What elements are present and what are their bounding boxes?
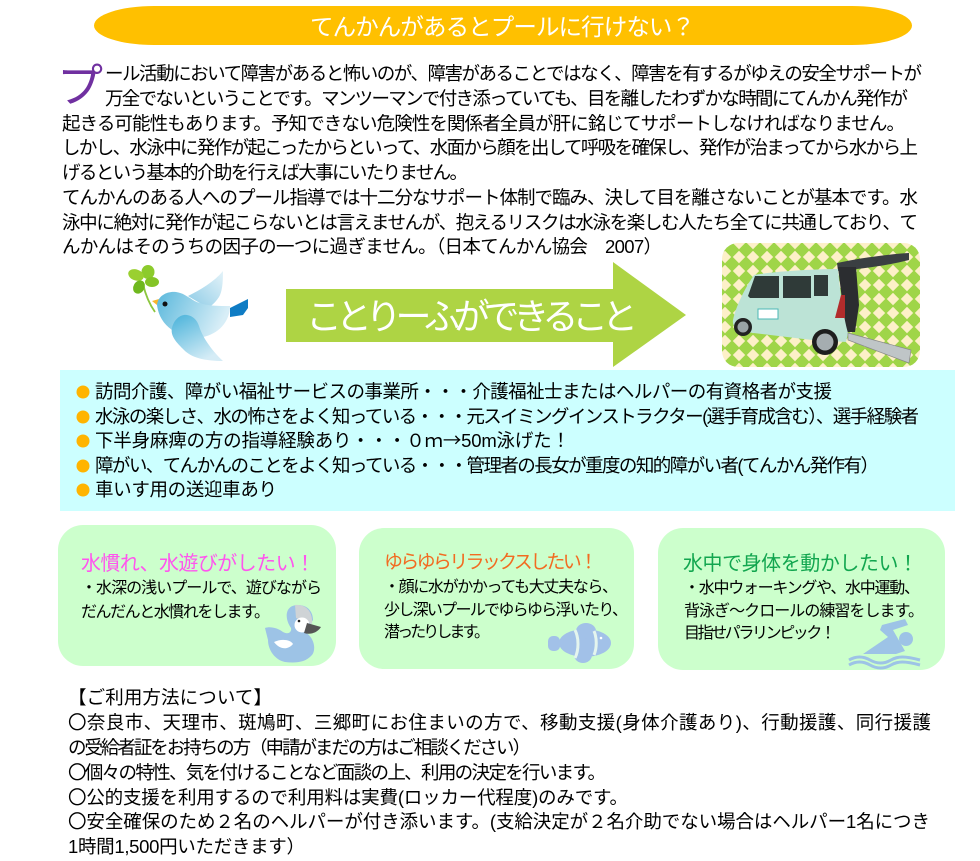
panel: exercise card: 目指せパラリンピック！ (684, 624, 836, 642)
panel: water play card: 水慣れ、水遊びがしたい！ (81, 552, 315, 575)
intro paragraph (57, 60, 922, 257)
icon: bluebird with clover (127, 265, 248, 361)
icon: swimmer (849, 619, 920, 668)
usage information: の受給者証をお持ちの方（申請がまだの方はご相談ください） (68, 737, 531, 758)
intro paragraph: 起きる可能性もあります。予知できない危険性を関係者全員が肝に銘じてサポートしなければなりません。 (62, 113, 905, 134)
icon: duck (265, 605, 321, 662)
list item: home-care staff: 訪問介護、障がい福祉サービスの事業所・・・介護福祉士またはヘルパーの有資格者が支援 (95, 381, 832, 402)
list item: coaching experience: 下半身麻痺の方の指導経験あり・・・０ｍ→50m泳げた！ (95, 427, 570, 453)
photo: accessible van on checker background (722, 243, 920, 367)
title banner: てんかんがあるとプールに行けない？ (310, 14, 695, 40)
panel: exercise card: 背泳ぎ～クロールの練習をします。 (684, 602, 924, 620)
intro paragraph: げるという基本的介助を行えば大事にいたりません。 (62, 162, 468, 183)
intro paragraph: ール活動において障害があると怖いのが、障害があることではなく、障害を有するがゆえの安全サポートが (105, 63, 922, 84)
usage information (68, 687, 931, 857)
list item: transport: 車いす用の送迎車あり (95, 479, 277, 500)
usage information: 〇公的支援を利用するので利用料は実費(ロッカー代程度)のみです。 (68, 787, 628, 808)
panel: water play card: だんだんと水慣れをします。 (81, 603, 270, 621)
panel: exercise card: ・水中ウォーキングや、水中運動、 (684, 579, 920, 597)
icon: clownfish (548, 623, 611, 663)
intro paragraph: んかんはそのうちの因子の一つに過ぎません。（日本てんかん協会 2007） (62, 236, 662, 257)
panel: relax card (359, 528, 634, 669)
usage information: 〇安全確保のため２名のヘルパーが付き添います。(支給決定が２名介助でない場合はヘルパー1名につき (68, 811, 930, 832)
usage information: 〇個々の特性、気を付けることなど面談の上、利用の決定を行います。 (68, 762, 606, 783)
intro paragraph: てんかんのある人へのプール指導では十二分なサポート体制で臨み、決して目を離さないことが基本です。水 (62, 187, 918, 208)
intro paragraph: 泳中に絶対に発作が起こらないとは言えませんが、抱えるリスクは水泳を楽しむ人たち全てに共通しており、て (62, 212, 918, 233)
panel: relax card: ・顔に水がかかっても大丈夫なら、 (384, 578, 618, 596)
panel: water play card (58, 525, 336, 666)
panel: what we can do (60, 370, 955, 511)
list item: swimming experience: 水泳の楽しさ、水の怖さをよく知っている・・・元スイミングインストラクター(選手育成含む）、選手経験者 (95, 406, 919, 427)
panel: relax card: 潜ったりします。 (384, 623, 490, 641)
intro paragraph: しかし、水泳中に発作が起こったからといって、水面から顔を出して呼吸を確保し、発作が治まってから水から上 (62, 137, 918, 158)
panel: exercise card: 水中で身体を動かしたい！ (683, 552, 918, 575)
usage information: 〇奈良市、天理市、斑鳩町、三郷町にお住まいの方で、移動支援(身体介護あり)、行動援護、同行援護 (68, 712, 931, 733)
arrow: ことりーふができること (286, 262, 686, 367)
arrow: ことりーふができること: ことりーふができること (306, 296, 638, 337)
list item: epilepsy knowledge: 障がい、てんかんのことをよく知っている・・・管理者の長女が重度の知的障がい者(てんかん発作有） (95, 455, 879, 476)
panel: relax card: ゆらゆらリラックスしたい！ (384, 551, 598, 573)
panel: exercise card (658, 528, 945, 670)
panel: water play card: ・水深の浅いプールで、遊びながら (81, 579, 322, 597)
drop cap: プ (57, 60, 103, 112)
title banner (94, 6, 912, 45)
usage heading: 【ご利用方法について】 (68, 687, 272, 708)
usage information: 1時間1,500円いただきます） (68, 836, 305, 857)
intro paragraph: 万全でないということです。マンツーマンで付き添っていても、目を離したわずかな時間にてんかん発作が (105, 88, 908, 109)
panel: relax card: 少し深いプールでゆらゆら浮いたり、 (384, 601, 628, 619)
